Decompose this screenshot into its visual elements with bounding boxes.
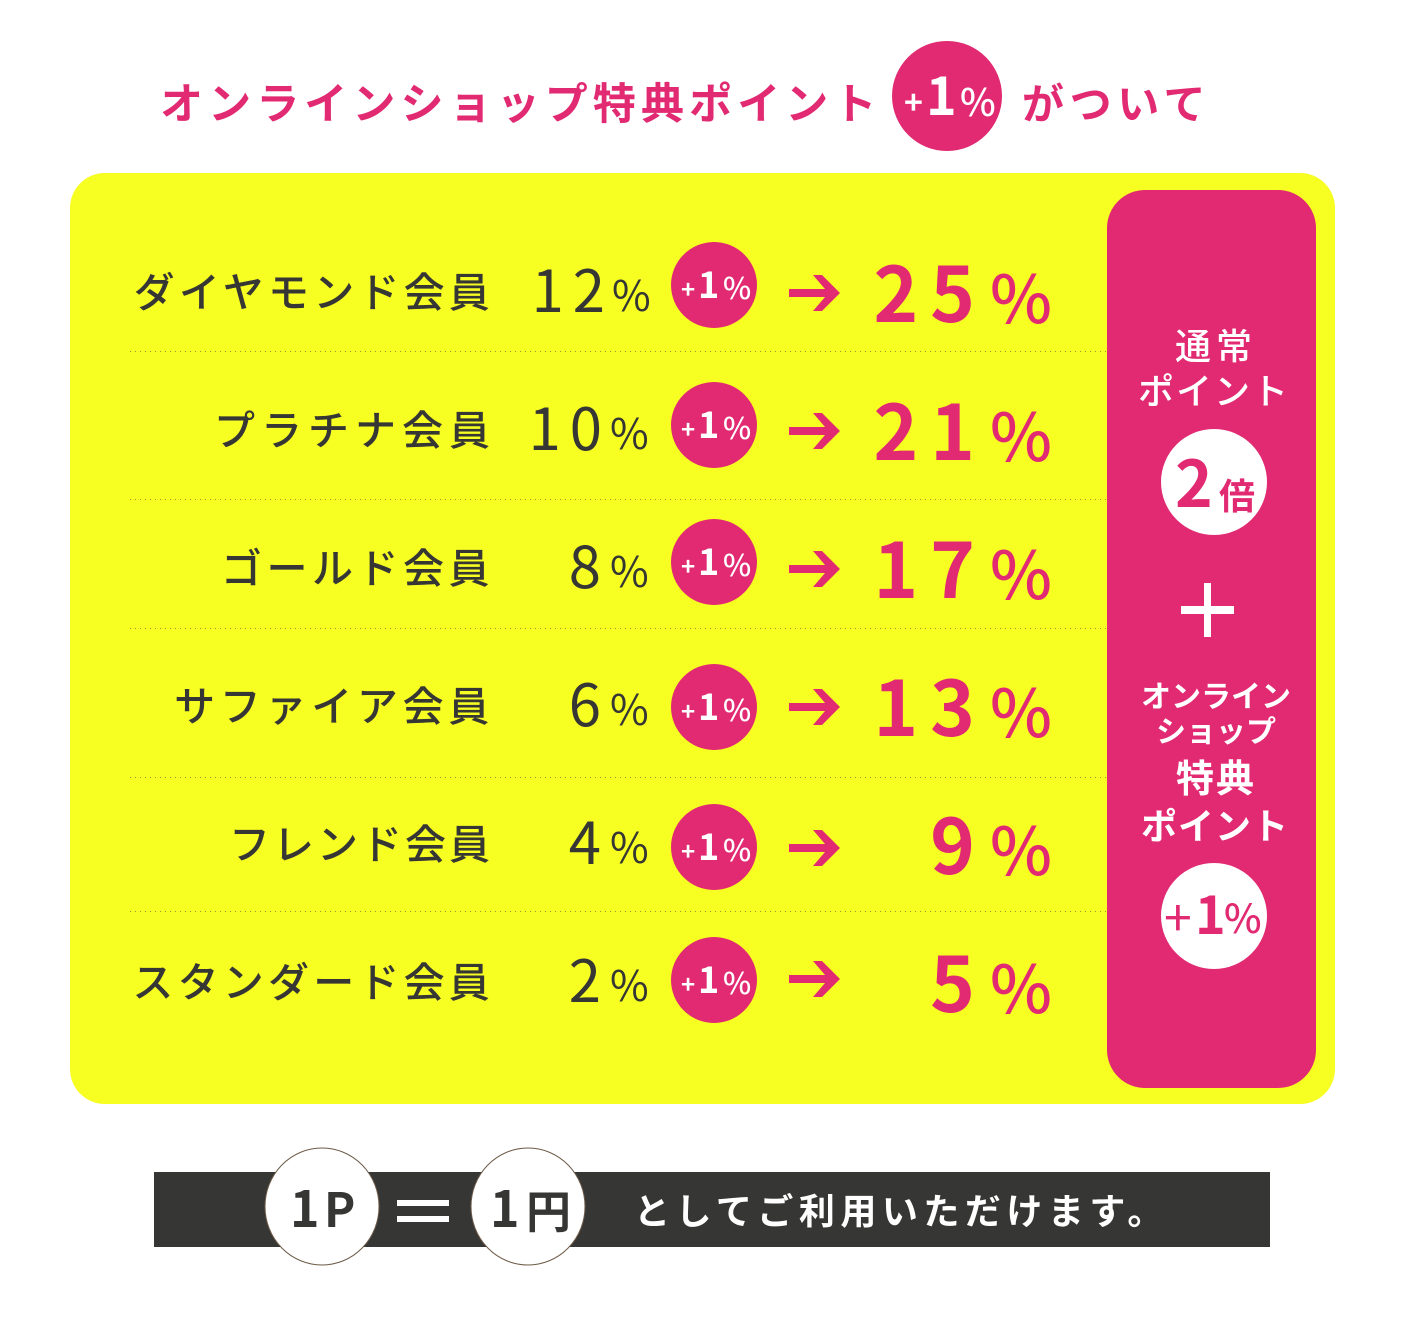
title: + bbox=[904, 78, 923, 124]
row: friend: + bbox=[681, 832, 695, 867]
footer bar: P bbox=[324, 1172, 355, 1241]
panel: formula sidebar: 倍 bbox=[1219, 468, 1255, 520]
panel: formula sidebar: オンライン bbox=[1141, 672, 1291, 716]
row: diamond bbox=[134, 234, 1052, 344]
row: friend: 9 bbox=[930, 786, 987, 896]
row: standard: スタンダード会員 bbox=[132, 949, 494, 1009]
row: gold: 8 bbox=[569, 521, 607, 605]
row: friend bbox=[229, 786, 1052, 896]
panel: formula sidebar: ポイント bbox=[1138, 363, 1290, 415]
row: gold bbox=[221, 510, 1052, 620]
panel: formula sidebar: ポイント bbox=[1141, 798, 1289, 850]
row: standard: 2 bbox=[569, 935, 607, 1019]
footer bar: 円 bbox=[526, 1176, 571, 1241]
row: standard bbox=[132, 924, 1052, 1034]
row: platinum bbox=[214, 372, 1052, 482]
panel: formula sidebar: 1 bbox=[1195, 874, 1226, 949]
panel: formula sidebar: + bbox=[1164, 879, 1192, 951]
row: gold: % bbox=[723, 541, 751, 585]
panel: formula sidebar: 2 bbox=[1175, 434, 1213, 526]
row: standard: % bbox=[723, 959, 751, 1003]
row: standard: 5 bbox=[930, 924, 987, 1034]
title: オンラインショップ特典ポイント bbox=[160, 70, 882, 132]
row: sapphire: 6 bbox=[569, 659, 607, 743]
row: friend: % bbox=[723, 826, 751, 870]
title bbox=[160, 41, 1211, 151]
row: diamond: 12 bbox=[532, 245, 614, 329]
footer bar: としてご利用いただけます。 bbox=[634, 1183, 1169, 1235]
footer bar: 1 bbox=[290, 1170, 320, 1242]
footer bar bbox=[154, 1148, 1270, 1265]
row: platinum: % bbox=[990, 385, 1052, 481]
row: friend: 1 bbox=[698, 819, 719, 871]
row: sapphire: + bbox=[681, 692, 695, 727]
title: % bbox=[960, 72, 996, 127]
row: gold: % bbox=[610, 539, 649, 600]
footer bar: 1 bbox=[490, 1170, 520, 1242]
title: がついて bbox=[1022, 71, 1211, 132]
row: standard: 1 bbox=[698, 952, 719, 1004]
row: friend: 4 bbox=[569, 797, 607, 881]
row: diamond: + bbox=[681, 270, 695, 305]
row: platinum: % bbox=[723, 404, 751, 448]
row: standard: + bbox=[681, 965, 695, 1000]
row: gold: + bbox=[681, 547, 695, 582]
row: gold: ゴールド会員 bbox=[221, 535, 494, 595]
row: diamond: 25 bbox=[873, 234, 987, 344]
row: friend: フレンド会員 bbox=[229, 811, 493, 871]
row: sapphire: サファイア会員 bbox=[174, 673, 494, 733]
row: diamond: % bbox=[723, 264, 751, 308]
row: platinum: % bbox=[610, 401, 649, 462]
title: 1 bbox=[926, 55, 957, 130]
row: diamond: % bbox=[612, 263, 651, 324]
row: diamond: % bbox=[990, 247, 1052, 343]
row: sapphire: 1 bbox=[698, 679, 719, 731]
row: sapphire bbox=[174, 648, 1052, 758]
row: platinum: 10 bbox=[529, 383, 611, 467]
row: gold: 1 bbox=[698, 534, 719, 586]
panel: formula sidebar: % bbox=[1224, 887, 1262, 945]
row: platinum: 21 bbox=[873, 372, 987, 482]
row: platinum: 1 bbox=[698, 397, 719, 449]
row: diamond: 1 bbox=[698, 257, 719, 309]
row: sapphire: % bbox=[610, 677, 649, 738]
panel: formula sidebar: 特典 bbox=[1176, 748, 1256, 803]
row: sapphire: 13 bbox=[873, 648, 987, 758]
row: platinum: + bbox=[681, 410, 695, 445]
row: friend: % bbox=[610, 815, 649, 876]
row: sapphire: % bbox=[990, 661, 1052, 757]
row: standard: % bbox=[990, 937, 1052, 1033]
panel: membership rates bbox=[70, 173, 1335, 1104]
row: standard: % bbox=[610, 953, 649, 1014]
row: gold: % bbox=[990, 523, 1052, 619]
row: diamond: ダイヤモンド会員 bbox=[134, 259, 494, 319]
panel: formula sidebar: 通常 bbox=[1175, 318, 1257, 370]
row: friend: % bbox=[990, 799, 1052, 895]
row: gold: 17 bbox=[873, 510, 987, 620]
row: platinum: プラチナ会員 bbox=[214, 397, 496, 457]
row: sapphire: % bbox=[723, 686, 751, 730]
panel: formula sidebar bbox=[1107, 190, 1316, 1088]
panel: formula sidebar: ショップ bbox=[1156, 707, 1276, 751]
